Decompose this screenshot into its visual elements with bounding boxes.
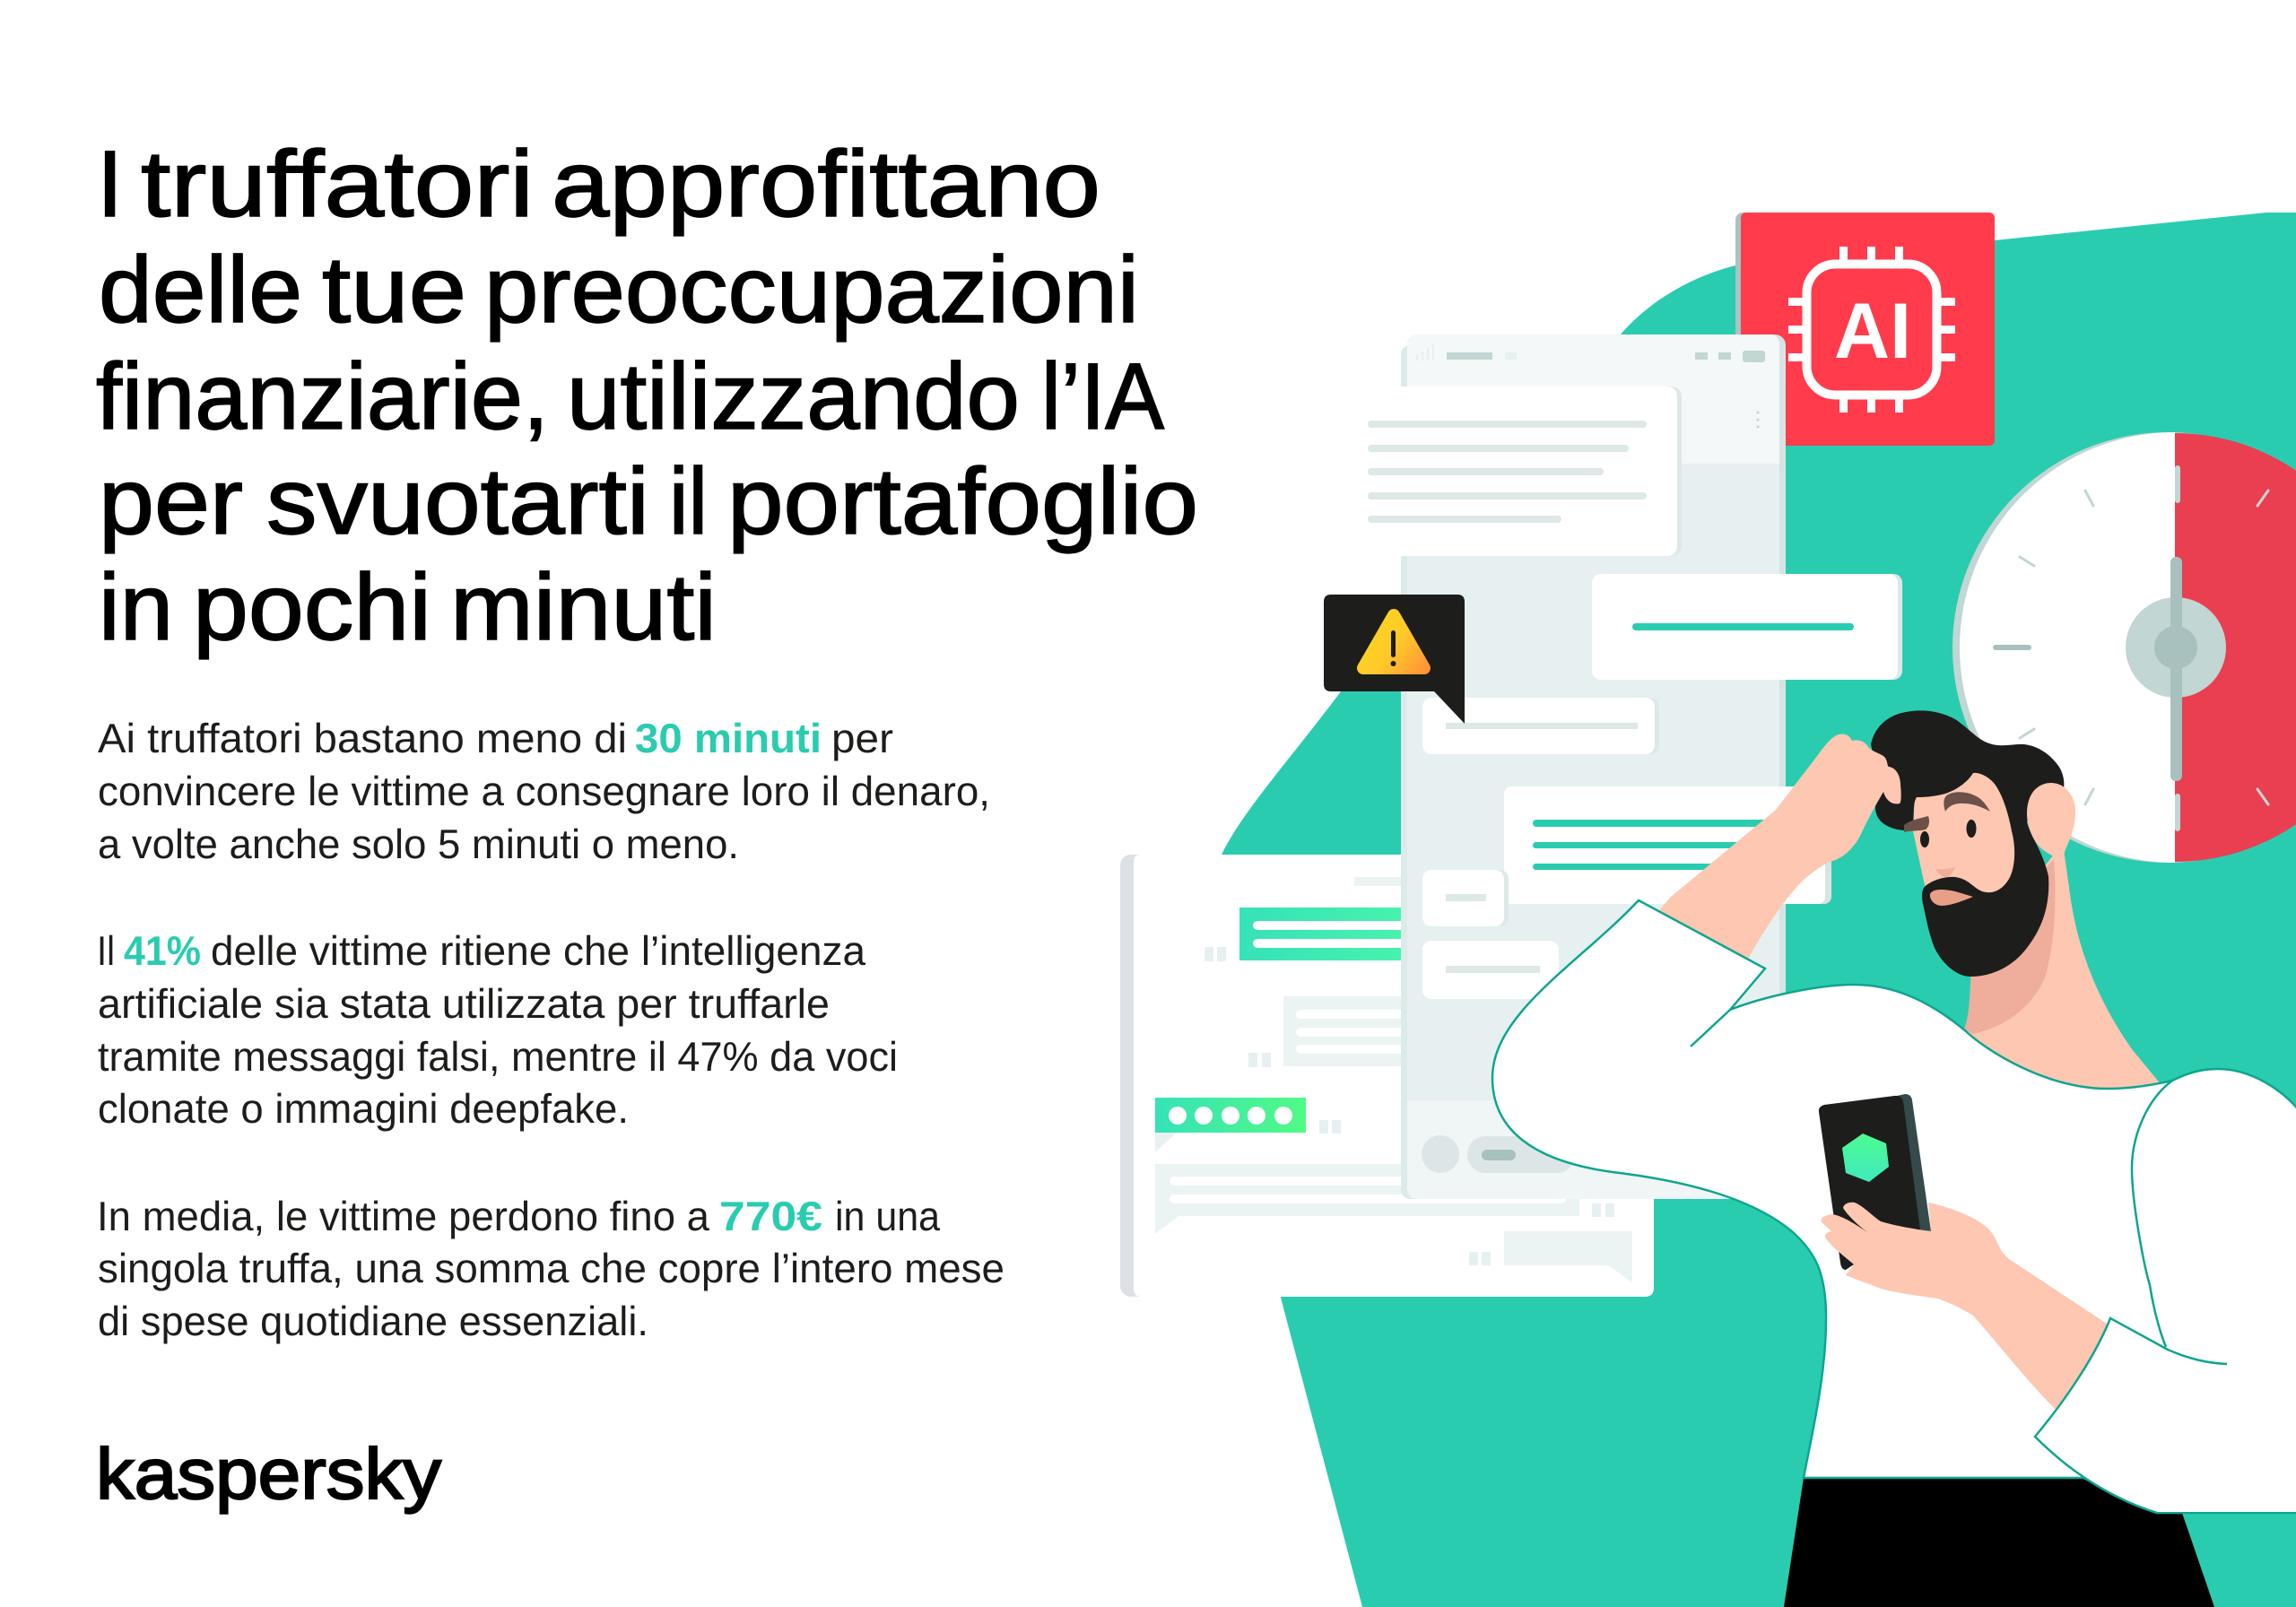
password message bbox=[1155, 1098, 1306, 1152]
title: portafoglio bbox=[727, 449, 1198, 554]
trousers bbox=[1784, 1478, 2214, 1607]
grey message bbox=[1283, 996, 1413, 1066]
icon: AI chip bbox=[1788, 247, 1955, 413]
text block: 41%: artificiale sia stata utilizzata per truffarle bbox=[98, 980, 830, 1027]
text block: 770€: singola truffa, una somma che copre l’intero mese bbox=[98, 1245, 1004, 1291]
text block: 41% bbox=[97, 927, 898, 1132]
chat bubble 5 bbox=[1422, 870, 1509, 926]
time stamps bbox=[1205, 947, 1614, 1265]
chat bubble 6 bbox=[1422, 941, 1559, 999]
icon: warning triangle bbox=[1363, 615, 1424, 668]
text block: 30 minuti: Ai truffatori bastano meno di bbox=[98, 715, 627, 761]
text block: 30 minuti bbox=[98, 715, 990, 867]
text block: 30 minuti: per bbox=[831, 715, 893, 761]
title: tue bbox=[322, 238, 466, 343]
mouth bbox=[1930, 890, 1973, 906]
title: in bbox=[99, 555, 173, 660]
title: utilizzando bbox=[567, 344, 1020, 449]
chat bubble 2 bbox=[1592, 574, 1902, 680]
phone bbox=[1819, 1094, 1931, 1270]
white shirt bbox=[1492, 900, 2296, 1513]
gauge dial bbox=[1952, 432, 2296, 863]
raised arm and hand bbox=[1632, 734, 1901, 964]
text block: 770€: 770€ bbox=[719, 1193, 822, 1239]
text block: 41%: 41% bbox=[124, 927, 201, 974]
neck bbox=[1962, 843, 2161, 1101]
menu dots bbox=[1756, 411, 1760, 429]
text block: 770€ bbox=[97, 1193, 1004, 1344]
status bar bbox=[1416, 344, 1765, 362]
right sleeve cuff bbox=[2035, 1318, 2296, 1512]
text block: 770€: di spese quotidiane essenziali. bbox=[98, 1298, 648, 1344]
title: l’IA bbox=[1041, 344, 1164, 449]
panel: AI card bbox=[1735, 213, 1995, 446]
title: pochi bbox=[193, 555, 431, 660]
title: minuti bbox=[450, 555, 717, 660]
nose bbox=[1935, 867, 1955, 877]
title: il bbox=[669, 449, 708, 554]
panel: background chat card bbox=[1120, 855, 1654, 1297]
input bar bbox=[1422, 1135, 1575, 1173]
eyebrow right bbox=[1944, 792, 1990, 812]
panel: chat phone window bbox=[1401, 334, 1786, 1199]
title bbox=[96, 132, 1198, 660]
icon: AI chip: AI bbox=[1834, 286, 1911, 375]
text block: 41%: delle vittime ritiene che l’intelligenza bbox=[211, 927, 865, 974]
hair and beard bbox=[1871, 710, 2064, 977]
title: preoccupazioni bbox=[484, 238, 1139, 343]
text block: 41%: Il bbox=[97, 927, 115, 974]
title: approfittano bbox=[552, 132, 1100, 237]
text block: 41%: clonate o immagini deepfake. bbox=[98, 1085, 629, 1132]
chat bubble 1 bbox=[1341, 387, 1682, 556]
phone hexagon icon bbox=[1842, 1134, 1889, 1182]
green message bbox=[1239, 908, 1410, 960]
eyes bbox=[1920, 820, 1977, 847]
chat bubble 3 bbox=[1422, 698, 1659, 754]
text block: 41%: tramite messaggi falsi, mentre il 47% da voci bbox=[98, 1033, 898, 1080]
title: delle bbox=[99, 238, 302, 343]
shirt crease bbox=[1691, 1010, 1730, 1047]
ear bbox=[2027, 783, 2075, 865]
face bbox=[1913, 764, 2022, 901]
text block: 770€: In media, le vittime perdono fino a bbox=[97, 1193, 709, 1239]
gauge knob bbox=[2126, 557, 2226, 781]
title: I bbox=[97, 132, 123, 237]
warning callout bbox=[1324, 595, 1465, 724]
text block: 30 minuti: 30 minuti bbox=[635, 715, 822, 761]
text block: 770€: in una bbox=[835, 1193, 940, 1239]
right sleeve cuff outline bbox=[2035, 1318, 2227, 1513]
eyebrow left bbox=[1904, 816, 1929, 832]
logo: kaspersky: kaspersky bbox=[96, 1434, 441, 1514]
title: svuotarti bbox=[266, 449, 649, 554]
text block: 30 minuti: a volte anche solo 5 minuti o meno. bbox=[98, 821, 739, 867]
text block: 30 minuti: convincere le vittime a consegnare loro il denaro, bbox=[98, 768, 990, 814]
holding hand and forearm bbox=[1821, 1203, 2112, 1412]
gauge ticks bbox=[1996, 468, 2268, 829]
right sleeve seam bbox=[2132, 1081, 2172, 1347]
title: truffatori bbox=[141, 132, 534, 237]
long grey message bbox=[1155, 1164, 1579, 1234]
neck shadow bbox=[1964, 859, 2055, 1034]
person bbox=[1492, 710, 2296, 1607]
title: finanziarie, bbox=[96, 344, 549, 449]
short grey message bbox=[1504, 1231, 1632, 1283]
chat bubble 4 bbox=[1504, 786, 1831, 904]
title: per bbox=[99, 449, 243, 554]
teal background shape bbox=[1222, 213, 2296, 1607]
